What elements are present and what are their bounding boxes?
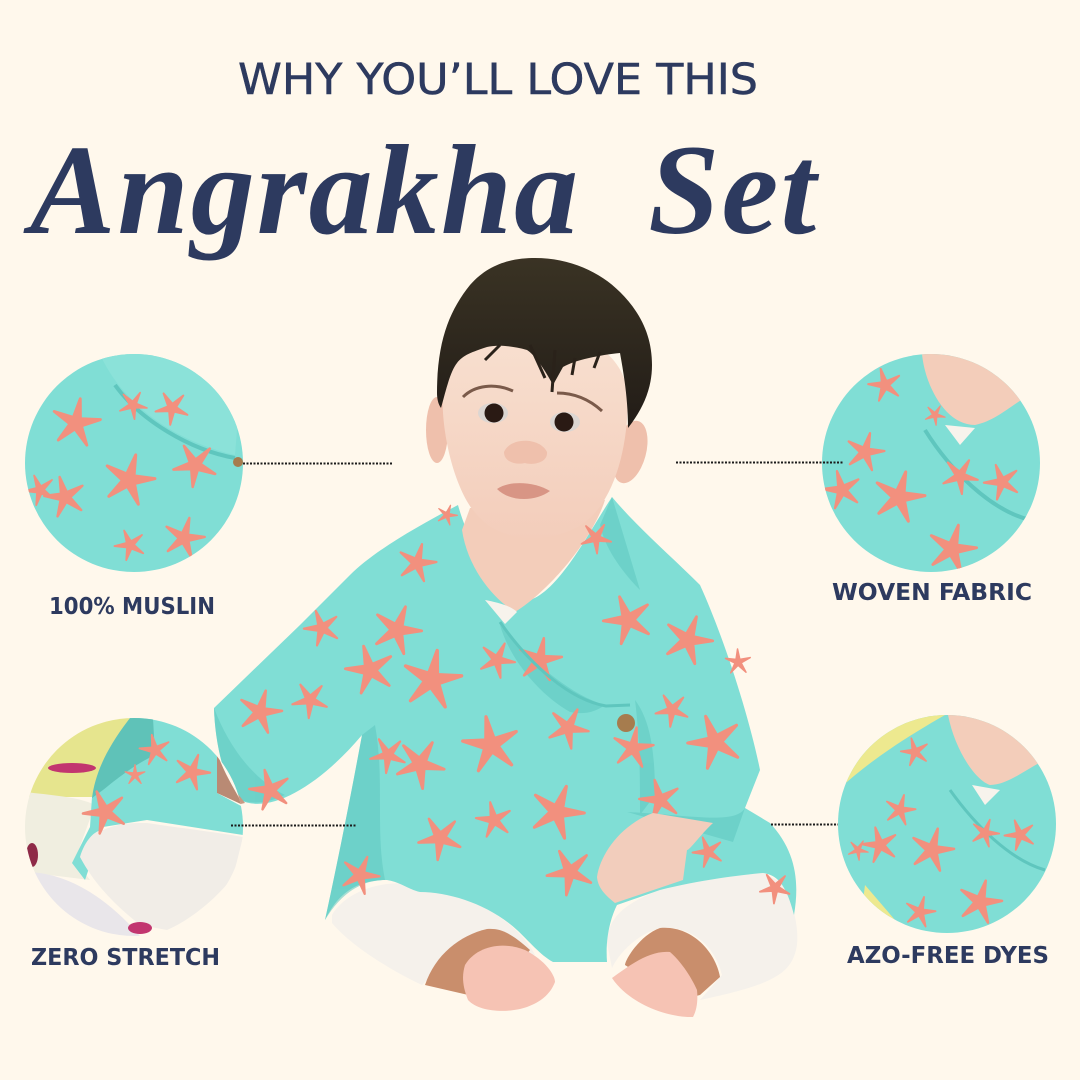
connector [676,462,843,464]
connector [243,462,393,464]
title: Angrakha Set: Angrakha Set [23,119,819,261]
callout: zero stretch [25,718,357,971]
callout: azo-free dyes [771,715,1056,969]
starfish print [235,502,796,907]
right hand [597,813,713,903]
callout: 100% muslin [21,354,393,620]
kurta shading [214,497,745,920]
label: ZERO STRETCH [31,945,220,971]
white pants [332,873,797,1000]
front placket line [500,622,630,706]
neck and white inner layer [462,500,605,612]
illustration: seated baby in angrakha set [212,258,797,1017]
label: AZO-FREE DYES [847,943,1049,969]
eyes [463,386,602,432]
swatch: fabric closeup [25,718,243,936]
label: 100% MUSLIN [49,594,215,620]
left hand at knee [212,765,245,806]
swatch: fabric closeup [838,715,1056,933]
hair [437,258,652,428]
ears [426,397,448,463]
mouth [497,483,550,499]
heading: why you'll love this: WHY YOU’LL LOVE THIS [238,55,758,105]
button [617,714,635,732]
nose [504,441,547,464]
foot: right [612,952,697,1017]
swatch: fabric closeup [21,354,243,572]
connector [771,824,838,826]
face [443,330,628,538]
swatch: fabric closeup [819,354,1040,574]
callout: woven fabric [676,354,1040,606]
kurta body and sleeves [214,497,796,962]
foot: left [463,946,555,1011]
label: WOVEN FABRIC [832,580,1032,606]
legs [425,929,530,1000]
connector [231,824,357,826]
